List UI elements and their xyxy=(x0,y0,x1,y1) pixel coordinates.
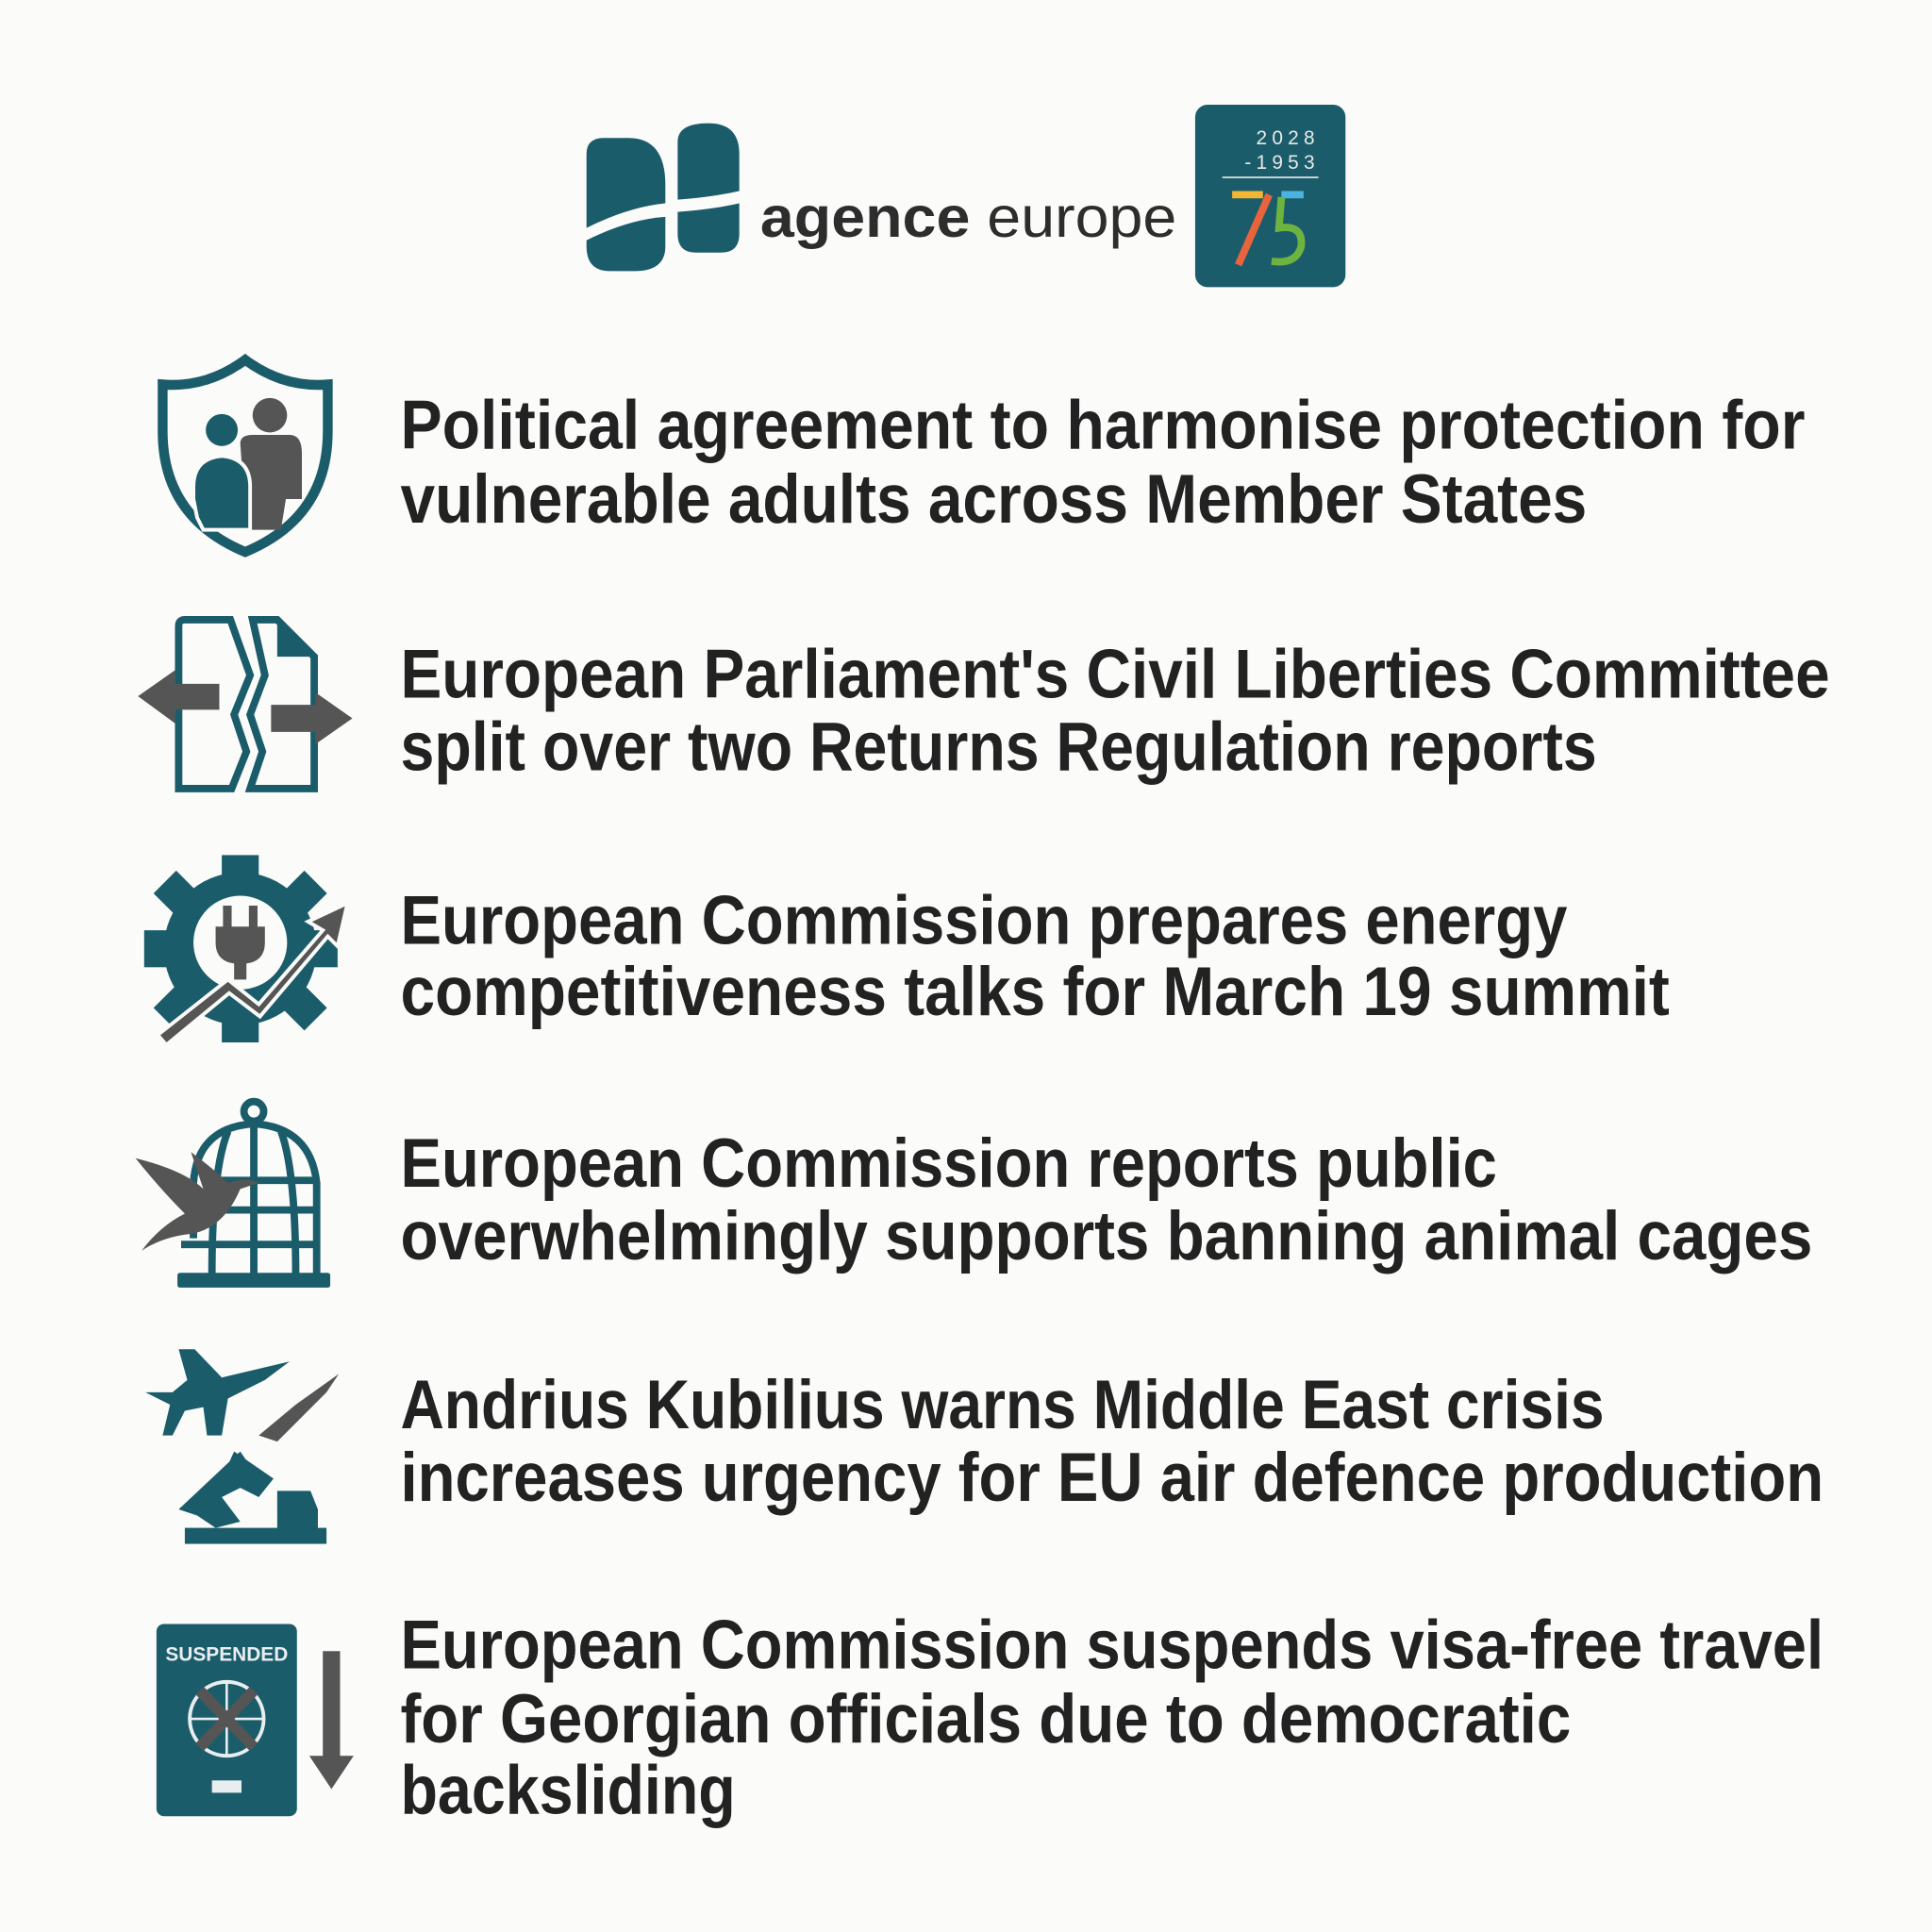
text: item 3: competitiveness talks for March 19 summit xyxy=(400,954,1670,1030)
text: item 2: split over two Returns Regulation reports xyxy=(400,708,1597,785)
75 anniversary badge: -1953 xyxy=(1244,152,1320,174)
75 anniversary badge: 2028 xyxy=(1257,127,1320,149)
item 4 xyxy=(136,1102,1812,1288)
logo symbol xyxy=(587,124,740,271)
item 6 xyxy=(157,1607,1824,1829)
text: item 3: European Commission prepares energy xyxy=(400,882,1568,958)
icon: shield with people xyxy=(162,359,327,552)
logo xyxy=(587,105,1345,287)
text: item 1: vulnerable adults across Member States xyxy=(400,461,1587,538)
text: item 6: for Georgian officials due to democratic xyxy=(400,1681,1571,1757)
logo wordmark: agence europe xyxy=(760,185,1176,250)
75 anniversary badge xyxy=(1195,105,1345,287)
text: item 4: European Commission reports public xyxy=(400,1125,1497,1202)
item 1 xyxy=(162,359,1805,552)
item 3 xyxy=(144,855,1670,1045)
icon: suspended passport with down arrow: SUSPENDED xyxy=(165,1644,288,1666)
icon: split document with arrows xyxy=(138,620,353,789)
text: item 5: Andrius Kubilius warns Middle East crisis xyxy=(400,1367,1605,1443)
icon: bird leaving cage xyxy=(136,1102,330,1288)
item 5 xyxy=(145,1349,1824,1544)
icon: suspended passport with down arrow xyxy=(157,1624,354,1816)
icon: gear with plug and rising arrow xyxy=(144,855,347,1045)
text: item 1: Political agreement to harmonise protection for xyxy=(400,387,1805,463)
text: item 6: backsliding xyxy=(400,1753,736,1829)
text: item 4: overwhelmingly supports banning animal cages xyxy=(400,1198,1812,1274)
icon: jet, missile, launcher xyxy=(145,1349,339,1544)
item 2 xyxy=(138,620,1830,789)
